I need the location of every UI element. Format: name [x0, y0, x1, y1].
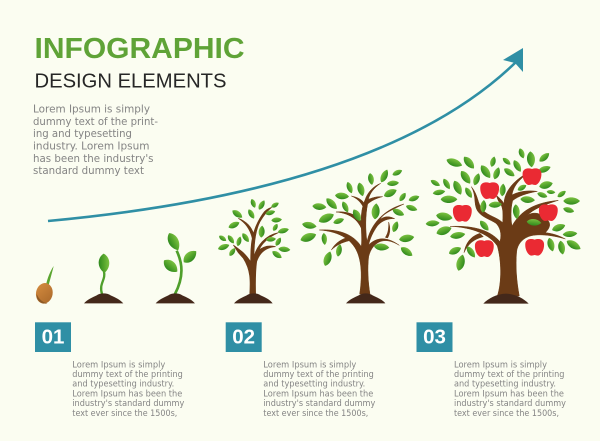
intro text block: ing and typesetting [33, 128, 132, 140]
step 01 badge: 01 [42, 326, 64, 348]
step 01 text: Lorem Ipsum is simply [72, 360, 165, 370]
step 01 text: and typesetting industry. [72, 380, 174, 390]
step 02 text: Lorem Ipsum has been the [263, 389, 373, 399]
step 03 text: dummy text of the printing [454, 370, 564, 380]
step 02 text: dummy text of the printing [263, 370, 374, 380]
step 02 text [263, 360, 375, 419]
intro text block: industry. Lorem Ipsum [33, 140, 150, 152]
stage: sprout [84, 253, 123, 303]
step 01 text: dummy text of the printing [72, 370, 183, 380]
intro text block: dummy text of the print- [33, 116, 158, 128]
stage: leafy tree [299, 168, 420, 303]
intro text block: standard dummy text [33, 165, 144, 177]
step 03 text: text ever since the 1500s, [454, 409, 559, 419]
step 01 text: Lorem Ipsum has been the [72, 389, 182, 399]
step 03 badge [416, 322, 452, 352]
intro text block [33, 104, 158, 177]
step 01 text [72, 360, 184, 419]
stage: seed [34, 266, 54, 305]
step 03 text: Lorem Ipsum has been the [454, 389, 564, 399]
subtitle: DESIGN ELEMENTS [34, 70, 226, 92]
step 03 text [454, 360, 566, 419]
stage: apple tree [425, 147, 582, 304]
step 03 badge: 03 [423, 326, 446, 348]
title: INFOGRAPHIC [34, 33, 244, 65]
step 03 text: industry's standard dummy [454, 399, 566, 409]
step 02 text: text ever since the 1500s, [263, 409, 368, 419]
stage: young tree [217, 198, 291, 303]
step 02 badge: 02 [232, 326, 255, 348]
step 02 text: and typesetting industry. [263, 380, 365, 390]
step 02 text: industry's standard dummy [263, 399, 375, 409]
step 03 text: and typesetting industry. [454, 380, 556, 390]
step 01 text: text ever since the 1500s, [72, 409, 177, 419]
stage: seedling [156, 231, 199, 303]
growth arrow [48, 48, 523, 221]
step 02 text: Lorem Ipsum is simply [263, 360, 356, 370]
step 01 badge [35, 322, 71, 352]
intro text block: has been the industry's [33, 153, 154, 165]
step 01 text: industry's standard dummy [72, 399, 184, 409]
step 03 text: Lorem Ipsum is simply [454, 360, 547, 370]
step 02 badge [226, 322, 262, 352]
intro text block: Lorem Ipsum is simply [33, 104, 150, 116]
